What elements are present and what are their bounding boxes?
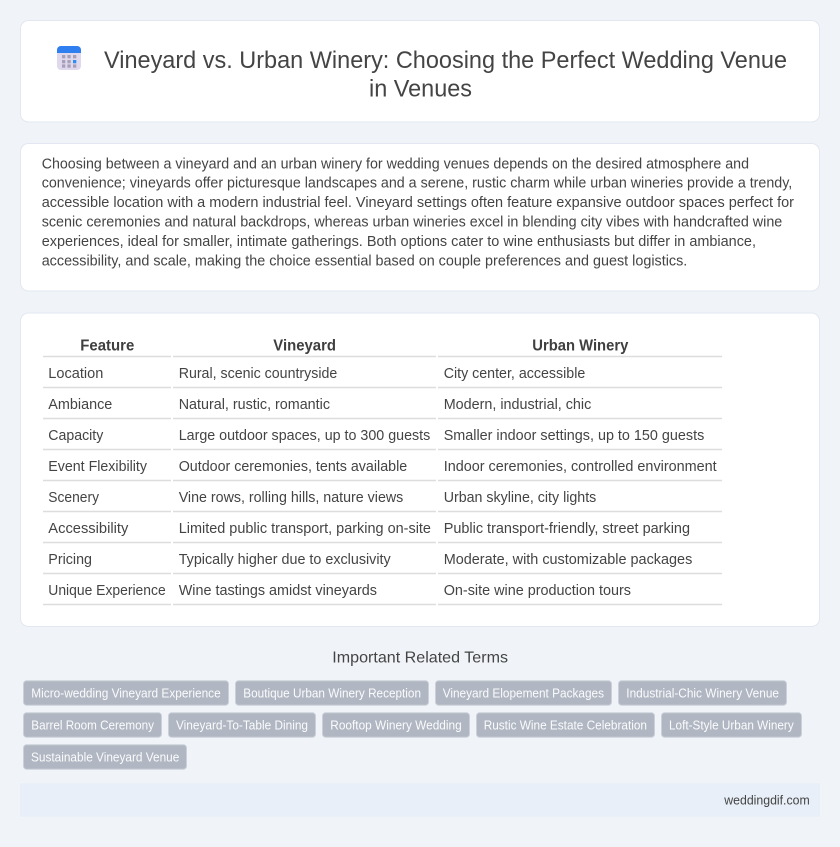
table row: Location: Rural, scenic countryside <box>179 366 337 382</box>
panel: comparison table <box>20 313 820 626</box>
text block: description paragraph: accessible location with a modern industrial feel. Vineyard settings often feature expansive outdoor spaces perfect for <box>42 195 794 211</box>
table row: Ambiance: Ambiance <box>48 397 112 413</box>
tag group: related terms <box>24 681 802 769</box>
table row: Accessibility <box>43 521 722 542</box>
table row: Unique Experience: Wine tastings amidst vineyards <box>179 583 377 599</box>
table row: Accessibility: Public transport-friendly, street parking <box>444 521 690 537</box>
table header row: Urban Winery <box>532 338 628 355</box>
table row: Scenery: Scenery <box>48 490 100 506</box>
footer bar <box>20 783 820 817</box>
tag <box>322 713 470 737</box>
footer bar: weddingdif.com <box>723 792 810 807</box>
icon: calendar <box>57 46 81 70</box>
table row: Capacity <box>43 428 722 450</box>
table header row: Vineyard <box>273 338 336 355</box>
table row: Pricing: Moderate, with customizable packages <box>444 552 692 568</box>
tag: Sustainable Vineyard Venue <box>31 749 179 764</box>
tag <box>436 681 612 705</box>
tag <box>24 713 162 737</box>
tag: Vineyard-To-Table Dining <box>176 717 308 732</box>
table row: Pricing <box>43 552 722 574</box>
text block: description paragraph <box>42 156 794 270</box>
table row: Scenery: Vine rows, rolling hills, nature views <box>179 490 403 506</box>
table row: Pricing: Typically higher due to exclusivity <box>179 552 391 568</box>
tag: Loft-Style Urban Winery <box>669 717 794 732</box>
text block: description paragraph: scenic ceremonies and natural backdrops, whereas urban wineries excel in blending city vibes with handcrafted wine <box>42 215 782 231</box>
table row: Ambiance: Modern, industrial, chic <box>444 397 591 413</box>
table row: Capacity: Large outdoor spaces, up to 300 guests <box>179 428 430 444</box>
tag: Vineyard Elopement Packages <box>443 685 604 700</box>
table row: Accessibility: Limited public transport, parking on-site <box>179 521 431 537</box>
tag <box>236 681 428 705</box>
heading: related terms: Important Related Terms <box>332 650 508 667</box>
title: in Venues <box>369 76 472 102</box>
table row: Location: City center, accessible <box>444 366 585 382</box>
tag: Barrel Room Ceremony <box>31 717 155 732</box>
table row: Event Flexibility: Outdoor ceremonies, tents available <box>179 459 407 475</box>
table row: Event Flexibility <box>43 459 722 480</box>
table header row: Feature <box>80 338 134 355</box>
text block: description paragraph: convenience; vineyards offer picturesque landscapes and a serene, rustic charm while urban wineries provide a trendy, <box>42 176 792 192</box>
table row: Capacity: Capacity <box>48 428 104 444</box>
table row: Capacity: Smaller indoor settings, up to 150 guests <box>444 428 704 444</box>
tag <box>24 745 186 769</box>
table row: Scenery <box>43 490 722 512</box>
table row: Unique Experience <box>43 583 722 604</box>
table row: Pricing: Pricing <box>48 552 92 568</box>
text block: description paragraph: experiences, ideal for smaller, intimate gatherings. Both options cater to wine enthusiasts but differ in ambiance, <box>42 234 756 250</box>
panel: header <box>20 20 820 122</box>
text block: description paragraph: Choosing between a vineyard and an urban winery for wedding venues depends on the desired atmosphere and <box>42 156 749 172</box>
tag <box>618 681 786 705</box>
panel: description <box>20 144 820 291</box>
title: Vineyard vs. Urban Winery: Choosing the Perfect Wedding Venue <box>104 47 787 74</box>
table row: Location <box>43 366 722 388</box>
tag: Micro-wedding Vineyard Experience <box>31 685 221 700</box>
table row: Event Flexibility: Event Flexibility <box>48 459 148 475</box>
table row: Accessibility: Accessibility <box>48 521 129 537</box>
text block: description paragraph: accessibility, and scale, making the choice essential based on couple preferences and guest logistics. <box>42 254 687 270</box>
table row: Scenery: Urban skyline, city lights <box>444 490 596 506</box>
table row: Ambiance: Natural, rustic, romantic <box>179 397 330 413</box>
table row: Ambiance <box>43 397 722 418</box>
tag: Boutique Urban Winery Reception <box>243 685 421 700</box>
title <box>104 47 787 102</box>
table row: Unique Experience: Unique Experience <box>48 583 166 599</box>
table row: Location: Location <box>48 366 103 382</box>
tag <box>168 713 316 737</box>
tag: Rustic Wine Estate Celebration <box>484 717 647 732</box>
table row: Event Flexibility: Indoor ceremonies, controlled environment <box>444 459 717 475</box>
table row: Unique Experience: On-site wine production tours <box>444 583 631 599</box>
tag: Rooftop Winery Wedding <box>330 717 462 732</box>
tag <box>662 713 802 737</box>
tag <box>476 713 654 737</box>
tag: Industrial-Chic Winery Venue <box>626 685 779 700</box>
tag <box>24 681 228 705</box>
table header row <box>43 338 722 356</box>
